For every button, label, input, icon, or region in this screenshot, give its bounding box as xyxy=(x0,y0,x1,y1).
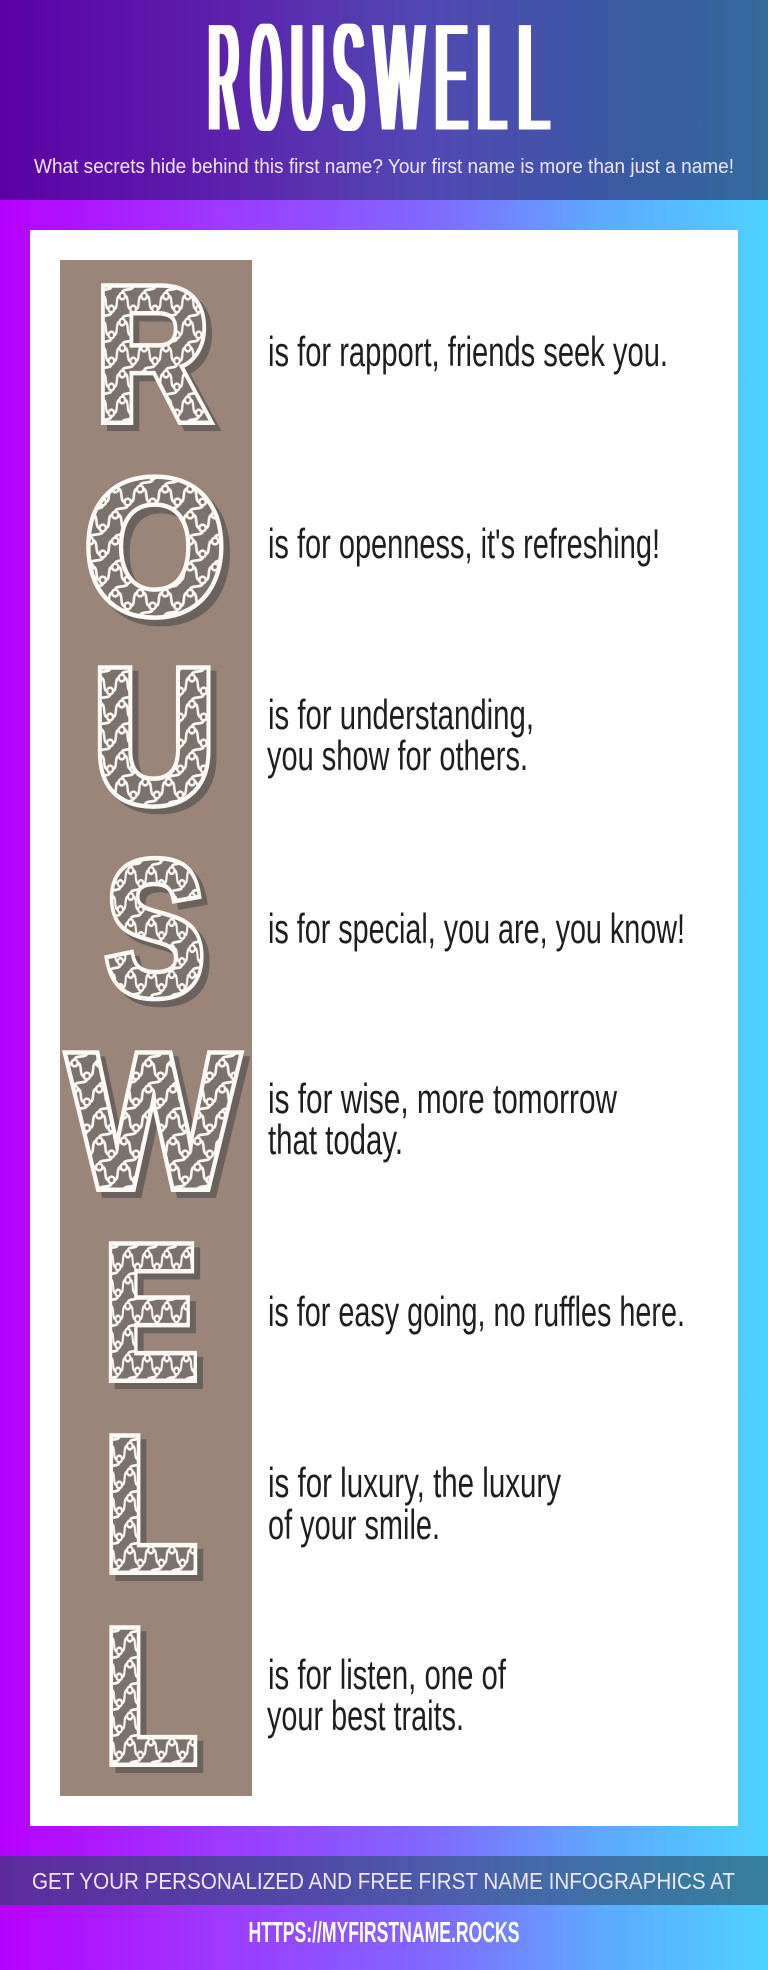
title xyxy=(209,0,549,165)
letter S: S xyxy=(105,823,205,1035)
text: second L meaning xyxy=(267,1651,506,1739)
text: U meaning: you show for others. xyxy=(267,732,528,779)
letter U: U xyxy=(92,630,216,842)
subtitle: What secrets hide behind this first name? Your first name is more than just a name! xyxy=(34,156,734,178)
letter U: U xyxy=(92,630,216,842)
footer call-to-action band xyxy=(0,1856,768,1905)
letter O: O xyxy=(84,441,226,653)
letter E: E xyxy=(109,1212,204,1424)
letter S: S xyxy=(111,829,211,1041)
text: U meaning xyxy=(267,691,534,779)
letter U: U xyxy=(98,636,222,848)
text: L meaning: of your smile. xyxy=(268,1501,440,1548)
text: W meaning: that today. xyxy=(268,1116,403,1163)
text: second L meaning: is for listen, one of xyxy=(268,1651,506,1698)
letter O: O xyxy=(84,441,226,653)
letter L: L xyxy=(110,1403,204,1616)
letter L: L xyxy=(110,1595,204,1808)
letter O: O xyxy=(90,448,232,660)
letter E: E xyxy=(103,1206,198,1418)
letter R: R xyxy=(95,248,210,461)
letter W: W xyxy=(74,1022,244,1234)
letter L: L xyxy=(104,1589,198,1802)
footer url: HTTPS://MYFIRSTNAME.ROCKS xyxy=(248,1917,520,1949)
header band xyxy=(0,0,768,200)
letter L: L xyxy=(104,1397,198,1610)
letter L: L xyxy=(104,1589,198,1802)
letter L: L xyxy=(104,1397,198,1610)
letter W: W xyxy=(68,1016,238,1228)
letter S: S xyxy=(105,823,205,1035)
text: second L meaning: your best traits. xyxy=(267,1692,464,1739)
letter E: E xyxy=(103,1206,198,1418)
letter W: W xyxy=(68,1016,238,1228)
text: U meaning: is for understanding, xyxy=(268,691,534,738)
letter R: R xyxy=(95,248,210,461)
letter R: R xyxy=(101,254,216,467)
text: L meaning xyxy=(268,1459,561,1548)
panel: white content card xyxy=(30,230,738,1826)
text: W meaning: is for wise, more tomorrow xyxy=(268,1075,617,1122)
panel: brown letter column xyxy=(60,260,252,1796)
text: L meaning: is for luxury, the luxury xyxy=(268,1459,561,1506)
text: W meaning xyxy=(268,1075,617,1163)
